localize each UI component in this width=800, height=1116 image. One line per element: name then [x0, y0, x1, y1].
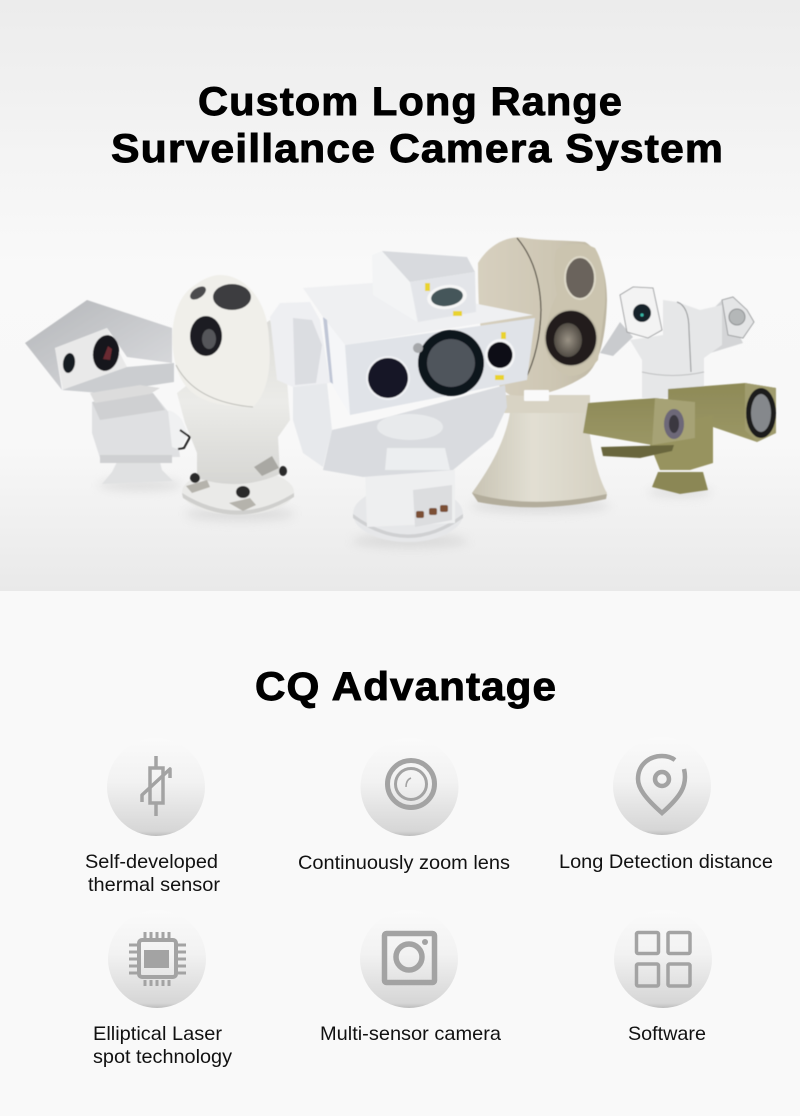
title: Custom Long Range	[198, 80, 623, 124]
background: upper studio panel	[0, 0, 800, 591]
icon: app grid	[614, 910, 712, 1008]
camera: housing with hood, left	[25, 300, 190, 484]
title: Surveillance Camera System	[111, 127, 724, 171]
label	[85, 851, 221, 896]
label: Long Detection distance	[559, 851, 773, 873]
icon: square camera	[360, 910, 458, 1008]
camera: large white multi-sensor gimbal	[270, 251, 535, 542]
label: Multi-sensor camera	[320, 1023, 501, 1045]
label: Elliptical Laser	[93, 1023, 223, 1045]
advantage: multi-sensor camera	[320, 910, 501, 1045]
label: thermal sensor	[88, 874, 221, 896]
icon: location pin	[613, 737, 711, 835]
heading: CQ Advantage: CQ Advantage	[255, 665, 557, 709]
advantage: software	[614, 910, 712, 1045]
camera: white PTZ, rear right	[600, 287, 754, 398]
camera: white dome on mount	[172, 275, 294, 515]
advantage: elliptical laser spot technology	[93, 910, 232, 1068]
product photo group: surveillance cameras	[25, 237, 776, 548]
icon: chip	[108, 910, 206, 1008]
camera: olive twin housing	[583, 383, 776, 494]
label	[93, 1023, 232, 1068]
floor shadows	[98, 479, 712, 548]
label: Software	[628, 1023, 706, 1045]
icon: lens	[360, 738, 458, 836]
label: Continuously zoom lens	[298, 852, 510, 874]
title	[111, 80, 724, 171]
advantage: self-developed thermal sensor	[85, 738, 221, 896]
advantage: long detection distance	[559, 737, 773, 873]
camera: tan dome with cone base	[472, 237, 607, 507]
background: lower paper panel	[0, 591, 800, 1116]
icon: thermistor	[107, 738, 205, 836]
label: spot technology	[93, 1046, 232, 1068]
label: Self-developed	[85, 851, 218, 873]
advantage: continuously zoom lens	[298, 738, 510, 874]
